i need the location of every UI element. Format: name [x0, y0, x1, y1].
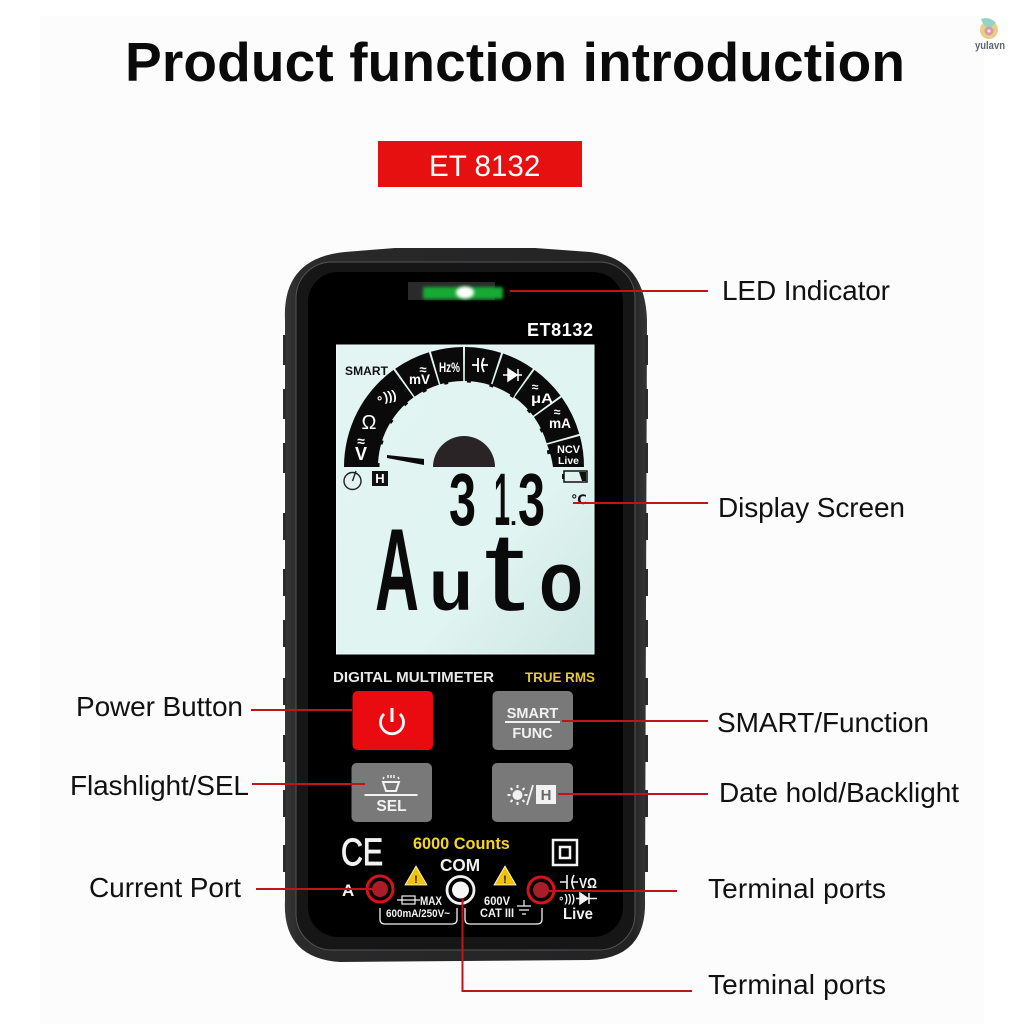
callout: Terminal ports right: Terminal ports: [708, 873, 886, 904]
multimeter: [283, 248, 648, 962]
terminal port: [528, 877, 554, 903]
callout: Date hold/Backlight: Date hold/Backlight: [719, 777, 959, 808]
warning right: [494, 866, 516, 886]
LCD screen: [336, 345, 594, 654]
callout: SMART/Function: SMART/Function: [717, 707, 929, 738]
rubber case: [283, 248, 648, 962]
warning left: [405, 866, 427, 886]
callout: Terminal ports bottom: Terminal ports: [708, 969, 886, 1000]
arc labels: Ω: [362, 412, 377, 434]
warning left: !: [414, 874, 418, 886]
terminal symbols: Live: [563, 906, 593, 923]
temperature reading: 3: [449, 458, 476, 541]
arc labels: [345, 358, 581, 467]
arc labels: ∘))): [374, 387, 398, 406]
temperature reading: 3: [518, 458, 545, 541]
hold icon: [372, 471, 388, 486]
A label: A: [342, 881, 354, 900]
arc labels: ≈: [554, 405, 561, 419]
title: Product function introduction: [125, 31, 905, 93]
auto mode reading: o: [539, 534, 583, 628]
watermark logo: yulavn: [975, 40, 1005, 52]
backlight hold button: H: [541, 787, 551, 804]
auto power-off icon: [344, 471, 361, 490]
fuse rating: MAX: [420, 896, 442, 908]
voltage rating: 600V: [484, 896, 510, 908]
flashlight sel button: SEL: [376, 798, 407, 815]
voltage rating: CAT III: [480, 908, 514, 920]
arc labels: mV: [409, 371, 431, 387]
watermark logo: [975, 18, 1005, 52]
temperature reading: 1: [494, 458, 510, 541]
terminal symbols: ∘))): [558, 893, 575, 905]
COM port: [447, 876, 474, 904]
backlight hold button: [492, 763, 573, 822]
warning right: !: [503, 874, 507, 886]
battery icon: [562, 471, 587, 482]
arc labels: μA: [531, 390, 553, 406]
auto mode reading: u: [429, 546, 473, 626]
callout: Terminal ports bottom: [462, 898, 886, 1000]
LED indicator: [408, 282, 503, 300]
callout: Flashlight/SEL: Flashlight/SEL: [70, 770, 249, 801]
needle: [387, 455, 424, 465]
smart func button: SMART: [507, 706, 558, 722]
hold icon: H: [375, 471, 385, 486]
arc labels: ≈: [419, 362, 427, 377]
arc labels: NCV: [557, 444, 581, 456]
arc labels: mA: [549, 415, 571, 431]
auto mode reading: A: [375, 504, 419, 635]
callout: Power Button: Power Button: [76, 691, 243, 722]
gauge hub: [433, 436, 495, 467]
temperature reading: .: [510, 501, 517, 531]
arc labels: SMART: [345, 364, 389, 378]
CE mark: CE: [341, 832, 383, 874]
temperature unit: ℃: [571, 492, 587, 507]
model label: ET8132: [527, 320, 593, 340]
fuse rating: [380, 896, 457, 924]
smart func button: FUNC: [512, 726, 553, 742]
double insulation icon: [553, 840, 577, 865]
flashlight sel button: [352, 763, 432, 822]
arc labels: Hz%: [439, 359, 460, 375]
true rms label: TRUE RMS: [525, 670, 595, 685]
power button: [352, 691, 433, 750]
digital multimeter label: DIGITAL MULTIMETER: [333, 669, 494, 686]
arc labels: V: [355, 444, 367, 464]
model badge: [378, 141, 582, 187]
COM label: COM: [440, 855, 480, 875]
terminal symbols: [558, 875, 597, 923]
function arc: [344, 347, 584, 467]
callout: Current Port: Current Port: [89, 872, 241, 903]
current port: [367, 876, 393, 902]
callout: LED Indicator: LED Indicator: [722, 275, 890, 306]
smart func button: [492, 691, 573, 750]
arc labels: Live: [558, 455, 579, 467]
terminal symbols: VΩ: [579, 875, 597, 892]
arc labels: ≈: [357, 433, 365, 449]
voltage rating: [465, 896, 542, 924]
arc labels: ≈: [532, 380, 539, 394]
counts label: 6000 Counts: [413, 835, 510, 853]
fuse rating: 600mA/250V~: [386, 908, 451, 920]
model badge: ET 8132: [429, 150, 540, 183]
auto mode reading: t: [484, 509, 525, 634]
callout: Display Screen: Display Screen: [718, 492, 905, 523]
